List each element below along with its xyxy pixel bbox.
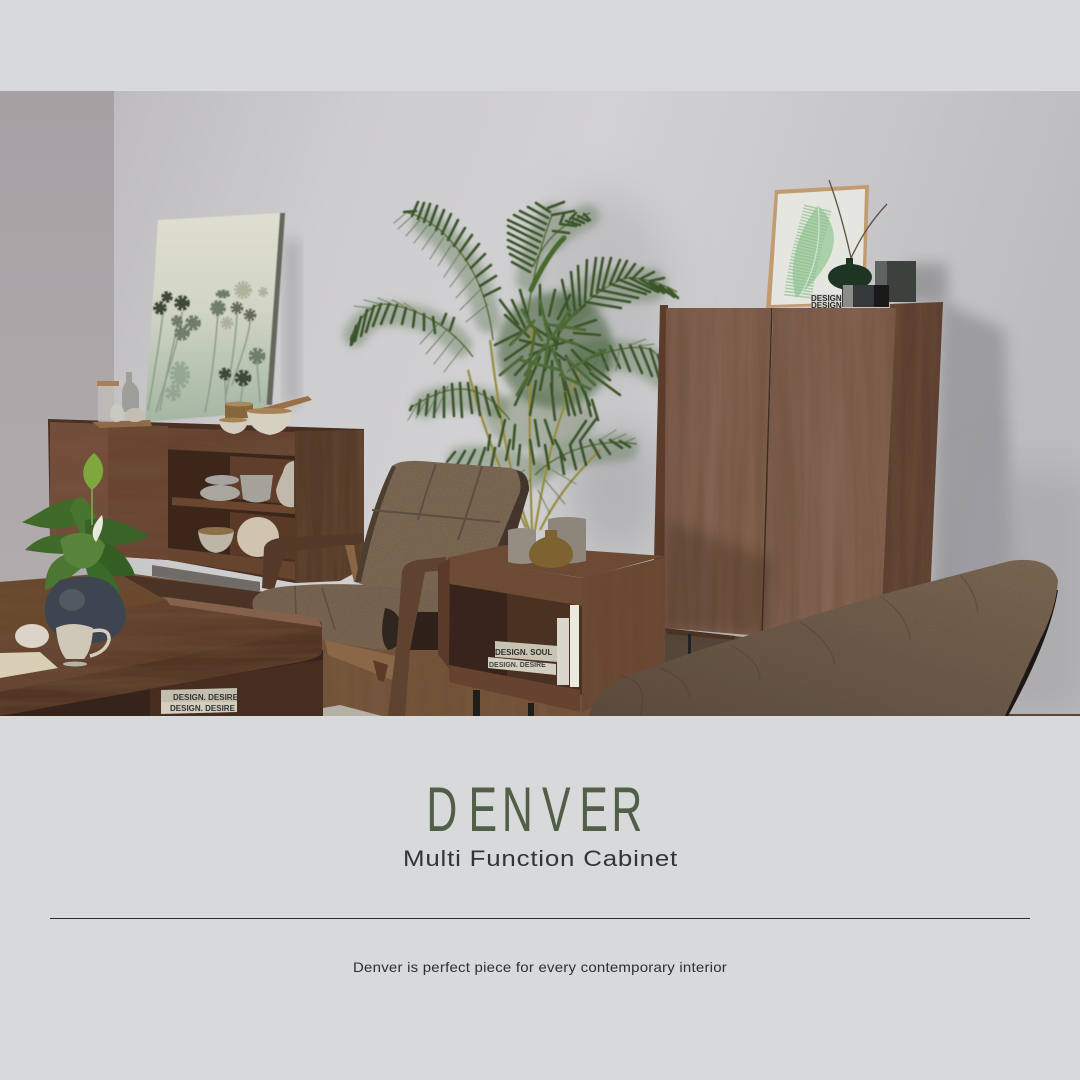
- left wall: [0, 91, 114, 582]
- frond: upper right: [552, 256, 680, 345]
- cabinet left edge: [654, 305, 668, 632]
- white spathe: [93, 515, 103, 542]
- table top surface: [0, 600, 322, 692]
- books on cabinet: DESIGN: [811, 301, 842, 310]
- description: Denver is perfect piece for every contemporary interior: [353, 959, 727, 975]
- table books: DESIGN. DESIRE: [170, 704, 236, 713]
- frond: low fill: [447, 420, 576, 514]
- door gap: [762, 308, 772, 636]
- blue pot: [45, 576, 126, 643]
- metal containers: [842, 261, 916, 307]
- cabinet right door: [762, 308, 896, 636]
- flower bud: [83, 453, 103, 490]
- frond: right middle: [566, 338, 659, 382]
- decor on cabinet: [766, 180, 916, 310]
- chair arm left: [262, 533, 364, 590]
- table books: DESIGN. SOUL: [495, 648, 552, 657]
- table books: DESIGN. DESIRE: [173, 693, 239, 702]
- framed leaf print: [766, 185, 869, 308]
- chair back: [355, 461, 529, 610]
- far floor area: [0, 574, 172, 634]
- table books: DESIGN. DESIRE: [489, 662, 546, 669]
- chair arm right: [388, 557, 446, 716]
- coffee table: [0, 574, 323, 716]
- table books: [488, 605, 579, 687]
- canvas artwork: [145, 213, 285, 422]
- potted peace lily: [22, 453, 150, 643]
- floor rug: [323, 705, 382, 716]
- open book: [0, 652, 58, 678]
- chair seat: [252, 584, 441, 650]
- dark floor under sideboard: [124, 576, 261, 610]
- frond: upper centre: [508, 202, 590, 323]
- sideboard shadow: [152, 565, 260, 592]
- wall shadows: [285, 190, 1080, 720]
- frond: lower left: [408, 383, 510, 420]
- back wall: [114, 91, 1080, 716]
- frond: left: [350, 298, 473, 372]
- books on cabinet: [811, 294, 843, 308]
- sofa: [589, 560, 1058, 716]
- palm foliage mass: [355, 215, 665, 475]
- sideboard: [48, 419, 364, 583]
- sideboard open shelves: [168, 450, 295, 560]
- table front edge: [0, 628, 322, 716]
- photo: living room with Denver furniture: [0, 91, 1080, 720]
- floor behind cabinet: [665, 628, 743, 662]
- door shade: [664, 520, 772, 636]
- palm stems: [468, 320, 600, 532]
- cabinet left door: [664, 308, 772, 636]
- leaves: [22, 497, 150, 610]
- tabletop decor on sideboard: [92, 372, 312, 435]
- side table: [438, 517, 665, 716]
- white jar: [15, 624, 49, 648]
- table underside: [0, 650, 323, 716]
- teacup: [56, 624, 109, 666]
- concrete cylinders: [508, 517, 586, 564]
- table legs: [473, 690, 480, 716]
- chair base: [325, 640, 405, 685]
- table shelf: [449, 665, 580, 712]
- product title: DENVER: [426, 775, 642, 845]
- table interior: [449, 582, 583, 695]
- divider: [50, 918, 1030, 919]
- cabinet side panel: [880, 302, 943, 610]
- armchair: [252, 461, 529, 716]
- table right panel: [582, 557, 665, 712]
- table top: [446, 545, 665, 578]
- books on cabinet: DESIGN: [811, 294, 842, 303]
- chair back legs: [345, 545, 360, 582]
- sideboard dishes: [198, 461, 294, 557]
- frond: upper left: [394, 202, 500, 340]
- frond: lower right: [535, 389, 637, 475]
- table left panel: [438, 558, 450, 668]
- floor: [0, 574, 592, 716]
- sideboard back shape: [48, 419, 364, 583]
- gold vase: [529, 530, 573, 568]
- cabinet legs: [664, 628, 735, 640]
- palm tree: [350, 202, 678, 532]
- flower stem: [91, 485, 93, 525]
- table front band: [450, 558, 583, 606]
- table books: [161, 688, 239, 714]
- twigs and vase: [828, 180, 887, 290]
- tall cabinet: [654, 302, 943, 658]
- product subtitle: Multi Function Cabinet: [403, 846, 678, 871]
- sideboard side panel: [295, 430, 364, 583]
- sideboard doors: [50, 422, 108, 536]
- frond: crown mass: [495, 285, 620, 420]
